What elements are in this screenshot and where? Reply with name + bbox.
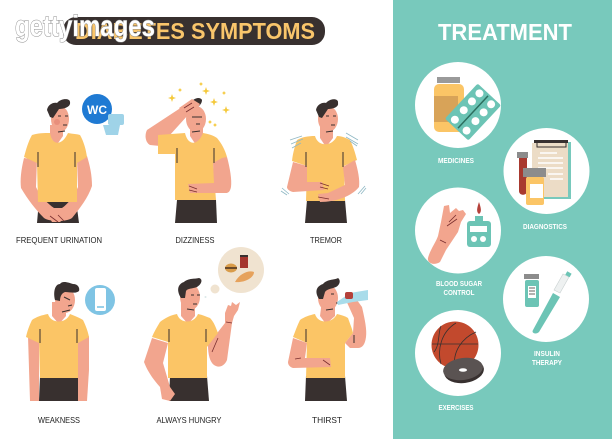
figure: man drinking [288,278,366,401]
treatment: insulin therapy: THERAPY [532,360,562,367]
label: FREQUENT URINATION [16,235,102,245]
panel: dizziness [146,82,231,245]
treatment: blood sugar control: CONTROL [444,290,475,297]
label: EXERCISES [438,405,474,412]
treatment: diagnostics [504,128,590,231]
treatment: blood sugar control [415,188,501,297]
figure: man with hand on forehead [146,98,231,223]
figure: drooping man [26,282,89,401]
panel: thirst [288,278,368,425]
label: DIAGNOSTICS [523,224,567,231]
thought bubble: food [204,247,264,298]
label: BLOOD SUGAR [436,281,482,288]
figure: man holding groin [21,99,92,223]
panel: tremor [281,99,366,245]
label: THIRST [312,415,342,425]
icon: low battery [85,285,115,315]
figure: man thinking of food [144,278,240,401]
label: INSULIN [534,351,560,358]
figure: trembling man [287,99,359,223]
heading: TREATMENT [438,19,572,45]
icon: WC badge and toilet [82,94,124,135]
icon: tremor lines [281,133,366,195]
label: WEAKNESS [38,415,80,425]
title banner: DIABETES SYMPTOMS [75,18,315,44]
icon: WC badge and toilet: WC [87,103,107,117]
treatment: insulin therapy [503,256,589,367]
panel: always hungry [144,247,264,425]
panel: weakness [26,282,115,425]
label: TREMOR [310,235,342,245]
panel: treatment [393,0,612,439]
label: ALWAYS HUNGRY [156,415,222,425]
label: MEDICINES [438,158,474,165]
panel: frequent urination [16,94,124,245]
icon: dizzy stars [168,82,230,127]
label: DIZZINESS [176,235,215,245]
icon: water bottle [337,290,368,305]
treatment: medicines [415,62,501,165]
watermark: gettyimages: gettyimages [15,10,155,43]
treatment: exercises [415,310,501,412]
